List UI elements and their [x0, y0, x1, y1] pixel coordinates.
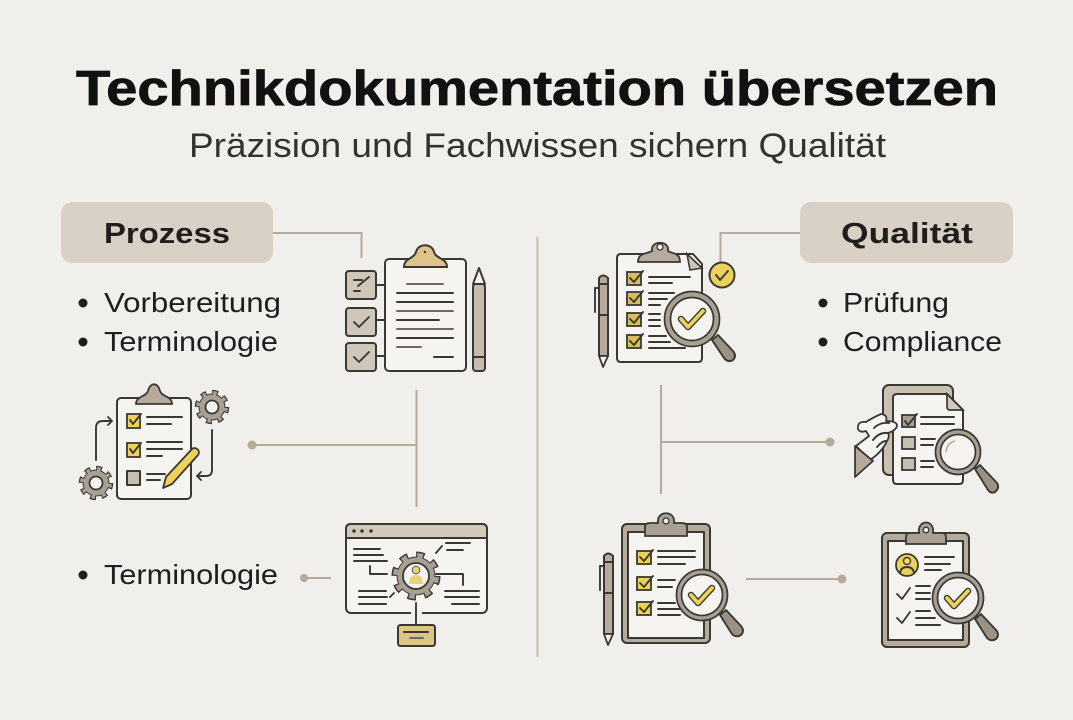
- icon: document with hand and magnifier: [855, 385, 998, 493]
- list item: Terminologie: Terminologie: [104, 559, 278, 590]
- connector: Qualität to checklist: [720, 233, 800, 262]
- heading: Qualität: [800, 202, 1013, 263]
- icon: framed checklist with magnifier and pen: [600, 513, 743, 645]
- list: Qualität: [818, 287, 1002, 357]
- connector: Terminologie to window: [300, 574, 331, 582]
- icon: profile clipboard with magnifier: [882, 522, 998, 647]
- connector tree: right: [661, 385, 834, 494]
- heading: Prozess: [61, 202, 273, 263]
- center divider: [536, 237, 538, 657]
- title: Technikdokumentation übersetzen: [76, 62, 998, 116]
- list: Qualität: Prüfung: [843, 287, 949, 318]
- icon: browser window with gear and user: [346, 524, 487, 646]
- heading: Qualität: Qualität: [841, 218, 973, 250]
- list: Prozess: [78, 287, 281, 357]
- connector tree: left: [248, 390, 416, 507]
- subtitle: Präzision und Fachwissen sichern Qualität: [189, 127, 887, 165]
- connector: Prozess to clipboard: [273, 233, 362, 258]
- list: Prozess: Vorbereitung: [104, 287, 281, 318]
- icon: clipboard with side checklist and pencil: [346, 245, 485, 371]
- icon: checklist with gears and pencil: [82, 384, 226, 499]
- heading: Prozess: Prozess: [104, 218, 230, 250]
- icon: checklist with magnifier and pen: [595, 243, 735, 367]
- list: Prozess: Terminologie: [104, 326, 278, 357]
- list: Qualität: Compliance: [843, 326, 1002, 357]
- connector: lower right: [746, 574, 846, 584]
